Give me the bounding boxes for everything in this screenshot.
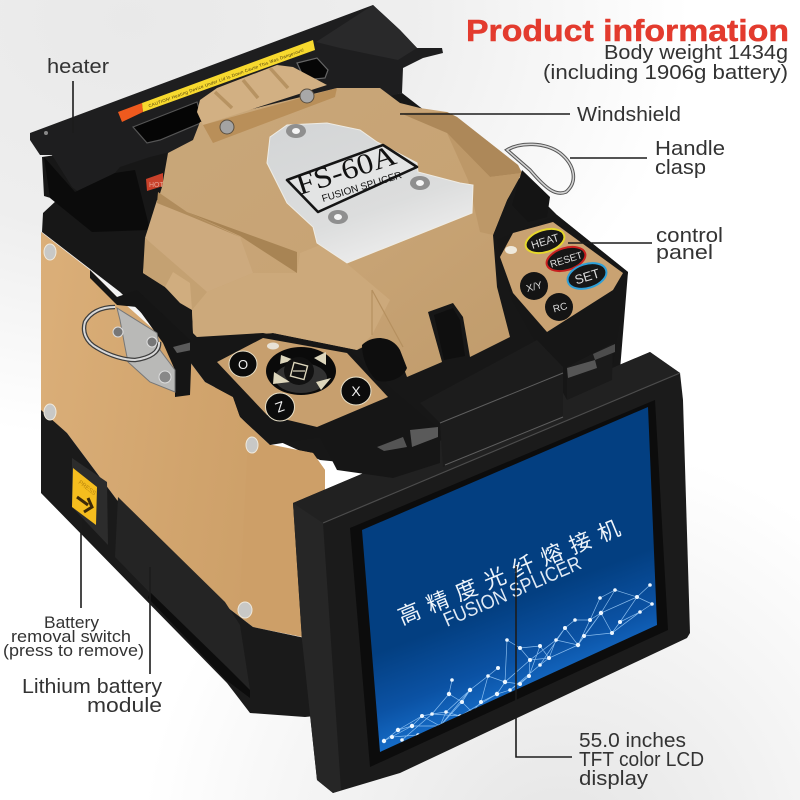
right handle clasp	[507, 144, 573, 222]
model label box	[287, 145, 417, 212]
battery release switch	[72, 468, 97, 525]
label: heater	[47, 56, 109, 133]
x button	[341, 377, 371, 405]
led	[505, 246, 517, 254]
switch arrow	[77, 497, 92, 512]
label: handle clasp: clasp	[655, 157, 706, 179]
hinge bar	[377, 340, 615, 467]
label: heater: heater	[47, 56, 109, 78]
battery groove	[148, 592, 250, 698]
reset button: RESET	[549, 250, 584, 271]
hot warning sticker: HOT	[149, 182, 164, 189]
label: handle clasp: Handle	[655, 138, 725, 160]
label: lithium battery module: Lithium battery	[22, 676, 162, 698]
heater lid	[30, 5, 443, 193]
cover lower light face	[192, 245, 390, 350]
label: battery removal switch: Battery	[44, 613, 100, 632]
tan windshield cover	[143, 88, 522, 377]
heater pin	[44, 131, 48, 135]
power button	[229, 351, 257, 377]
body weight info: Body weight 1434g	[604, 42, 788, 64]
product name: FUSION SPLICER	[321, 170, 403, 205]
cover right facet	[447, 133, 522, 235]
clasp bracket	[117, 308, 175, 392]
monitor frame	[293, 352, 690, 793]
cover left ridge facet	[145, 200, 253, 292]
side screws	[44, 244, 258, 618]
x button: X	[351, 383, 361, 399]
yellow caution strip: CAUTION! Heating Device Under Lid Is Down Cause This Was Dangerous!	[148, 47, 305, 108]
cover tab	[165, 272, 192, 310]
clasp bolts	[113, 327, 123, 337]
battery release housing	[72, 458, 108, 545]
clasp ring	[507, 144, 573, 193]
heater slot right	[297, 58, 328, 80]
label: control panel: control	[656, 225, 723, 247]
screen english title: FUSION SPLICER	[440, 552, 585, 632]
rc button: RC	[552, 301, 569, 315]
label: display	[516, 566, 704, 790]
hinge highlight	[440, 373, 563, 465]
clasp black column	[90, 270, 192, 397]
frame highlight	[323, 373, 680, 523]
label: battery removal switch: removal switch	[11, 627, 131, 646]
label: display: 55.0 inches	[579, 730, 686, 752]
frame top face	[293, 352, 680, 523]
z button	[266, 393, 294, 421]
hot warning sticker	[146, 173, 164, 191]
label: lithium battery module: module	[87, 695, 162, 717]
cover dark band	[157, 192, 240, 237]
led	[267, 342, 279, 350]
left control panel	[217, 338, 388, 427]
hinge roller	[362, 338, 407, 382]
body weight info: (including 1906g battery)	[543, 62, 788, 84]
heat button: HEAT	[530, 232, 561, 252]
label: lithium battery module	[22, 567, 162, 717]
lcd screen	[362, 407, 657, 752]
battery release switch: PRESS	[77, 480, 96, 497]
cover crease	[372, 290, 403, 347]
label: display: TFT color LCD	[579, 749, 704, 771]
z button: Z	[273, 398, 287, 416]
plate screws	[286, 124, 306, 138]
clasp base	[512, 170, 550, 222]
title: Product information	[466, 13, 789, 48]
orange warning sticker	[118, 103, 143, 122]
notch roller	[434, 308, 465, 360]
clasp ring	[84, 307, 159, 360]
lock flag	[197, 65, 337, 143]
silver nameplate	[267, 123, 473, 263]
label: handle clasp	[570, 138, 725, 179]
cover shaded groove	[187, 212, 297, 273]
lithium battery module	[115, 497, 250, 690]
heater shaded facet	[316, 5, 417, 60]
left deck surround	[190, 333, 440, 478]
inner bezel	[350, 400, 668, 767]
power button: O	[238, 357, 248, 372]
body weight info	[543, 42, 788, 84]
cover dark top-right facet	[400, 112, 522, 177]
clasp cap	[173, 342, 192, 353]
label: windshield: Windshield	[577, 104, 681, 126]
label: control panel	[568, 225, 723, 264]
black rear chassis	[42, 93, 628, 470]
hinge gray facets	[567, 360, 597, 378]
gold side panel	[41, 232, 325, 637]
set button: SET	[573, 266, 601, 287]
flag strip	[203, 88, 337, 143]
network graphic	[382, 583, 654, 743]
right control panel	[500, 222, 623, 332]
label: battery removal switch	[3, 517, 144, 660]
x/y button: X/Y	[525, 280, 544, 295]
right side panel tone	[240, 440, 325, 637]
right hinge block	[567, 343, 613, 400]
label: battery removal switch: (press to remove)	[3, 641, 144, 660]
right deck surround	[497, 215, 628, 400]
heater slot left	[133, 102, 203, 143]
label: control panel: panel	[656, 242, 713, 264]
label: display: display	[579, 768, 648, 790]
flag ridges	[215, 68, 288, 108]
tilting monitor	[293, 352, 690, 793]
frame left face	[293, 503, 341, 793]
cover left lower facet	[143, 238, 207, 310]
screen chinese title: 高精度光纤熔接机	[394, 515, 624, 630]
heater compartment	[44, 157, 150, 232]
d-pad	[266, 347, 336, 395]
flag screws	[220, 120, 234, 134]
model number: FS-60A	[292, 139, 400, 202]
left clasp	[84, 270, 192, 397]
black base and battery	[41, 410, 325, 717]
